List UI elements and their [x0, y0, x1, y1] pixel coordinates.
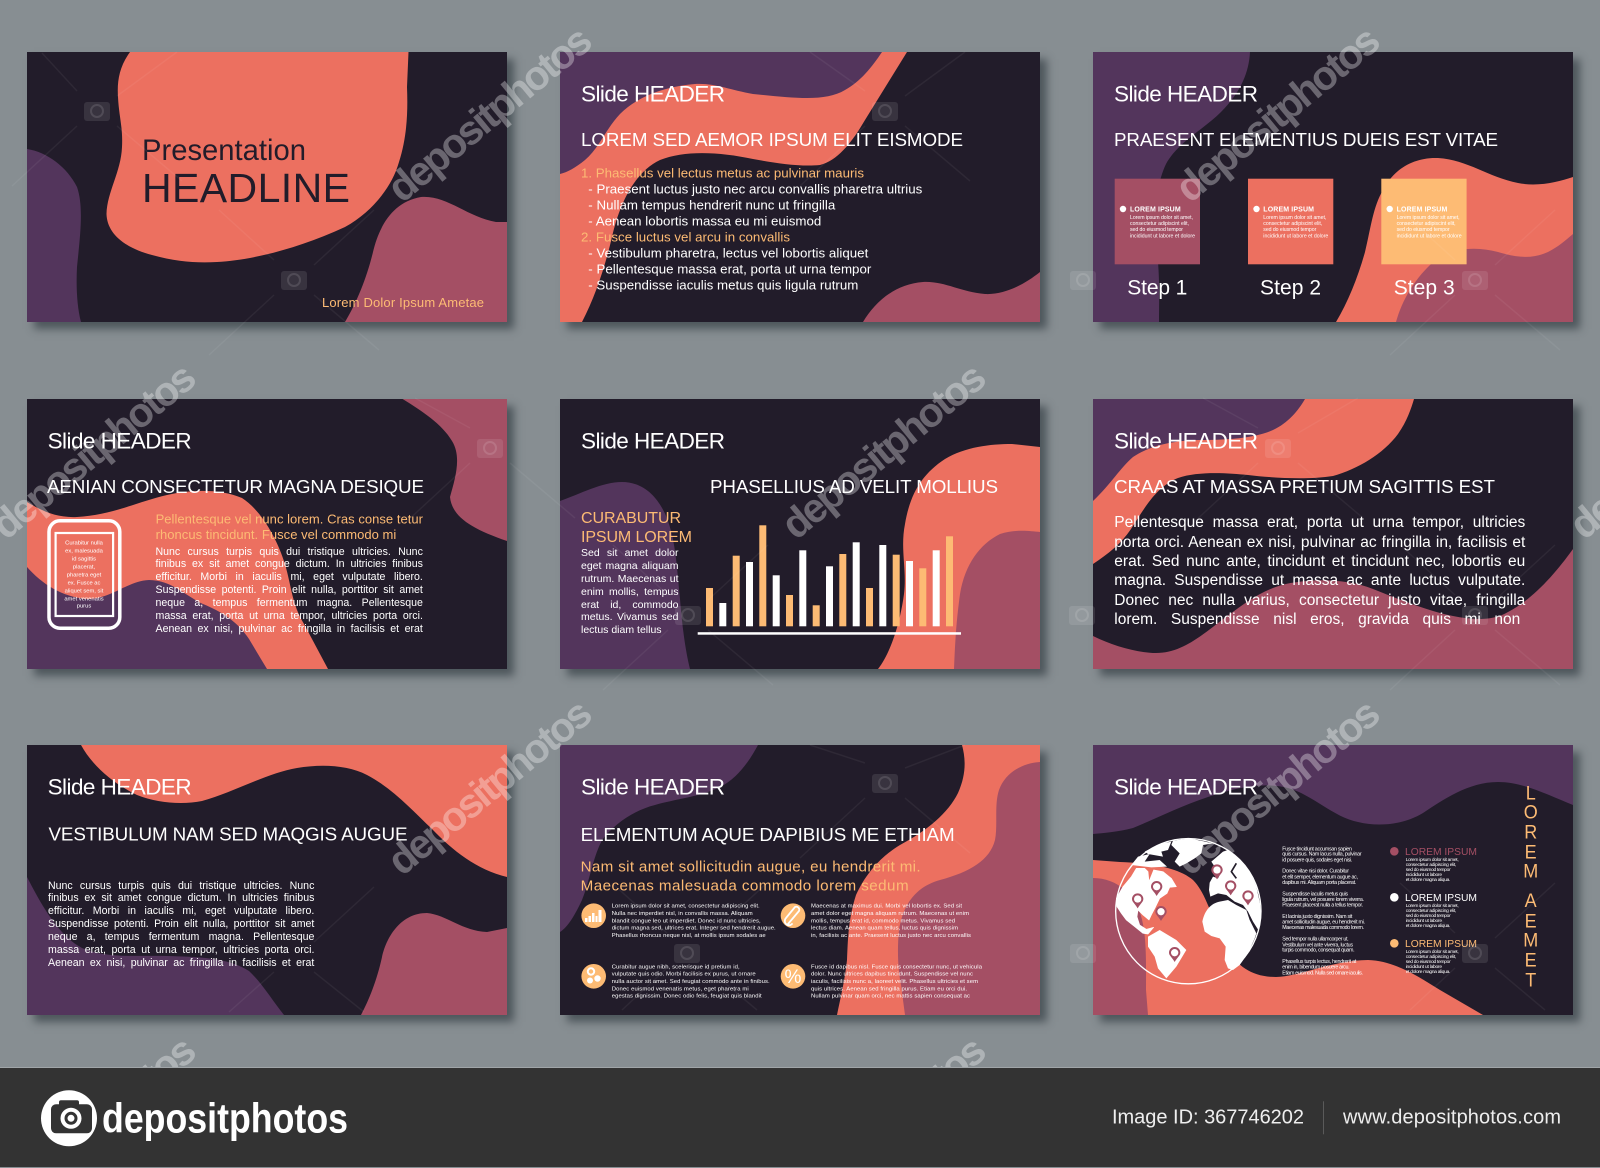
icon: phone with text: placerat,	[72, 564, 95, 570]
text block 1	[612, 904, 776, 939]
slide 2: numbered list	[560, 52, 1040, 322]
icon: paperclip	[781, 903, 805, 928]
body paragraph: finibus ex sit amet congue dictum. In ultricies finibus	[156, 558, 423, 570]
icon: phone with text: amet venenatis	[64, 596, 103, 602]
body paragraph: finibus ex sit amet congue dictum. In ultricies finibus	[48, 892, 314, 904]
text column: Praesent placerat nulla a tellus tempor.	[1283, 903, 1363, 909]
bar chart	[698, 525, 961, 634]
shape: purple bottom	[26, 877, 284, 1015]
icon: phone with text: Curabitur nulla	[65, 540, 103, 546]
vertical title: M	[1524, 930, 1538, 952]
text column: Donec vitae nisi dolor. Curabitur	[1283, 869, 1350, 875]
orange lead text: Nam sit amet sollicitudin augue, eu hendrerit mi.	[581, 858, 921, 875]
text column: Fusce tincidunt accumsan sapien	[1283, 846, 1352, 852]
slide header: Slide HEADER	[47, 774, 191, 799]
vertical title: E	[1525, 950, 1537, 972]
subtitle: Lorem Dolor Ipsum Ametae	[322, 295, 484, 310]
text column: et elit semper, elementum augue ac,	[1283, 874, 1358, 880]
numbered list: - Suspendisse iaculis metus quis ligula rutrum	[588, 277, 858, 292]
orange lead text: Pellentesque vel nunc lorem. Cras conse tetur	[155, 511, 423, 526]
slide header: Slide HEADER	[581, 774, 725, 799]
legend item 1: LOREM IPSUM	[1405, 847, 1477, 858]
shape: rose wave	[1396, 234, 1573, 322]
shape: purple top	[1093, 745, 1573, 834]
icon: phone with text: id sagittis	[71, 556, 96, 562]
orange lead text: rhoncus tincidunt. Fusce vel commodo mi	[155, 527, 396, 542]
vertical title: A	[1525, 891, 1537, 912]
body paragraph: neque a, tempus fermentum magna. Pellentesque	[156, 597, 423, 609]
shape: rose bottom	[360, 913, 506, 1015]
slide header: Slide HEADER	[47, 428, 191, 453]
icon: phone with text: ex. Fusce ac	[67, 580, 100, 586]
slide 8: four icon blocks	[560, 745, 1040, 1015]
text block 3: Donec euismod venenatis metus, eget pharetra mi	[612, 986, 749, 992]
icon: percent: %	[785, 967, 802, 988]
slide header: Slide HEADER	[1114, 81, 1258, 106]
step card 2: sed do eiusmod tempor	[1264, 227, 1317, 233]
heading: presentation: Presentation	[142, 135, 306, 167]
slide header: Slide HEADER	[1114, 774, 1258, 799]
icon: phone with text: aliquet sem, sit	[64, 588, 103, 594]
shape: purple blob	[26, 149, 80, 322]
shape: rose wave	[863, 272, 1040, 322]
step card 1: LOREM IPSUM	[1130, 206, 1181, 213]
body paragraph: Nunc cursus turpis quis dui tristique ultricies. Nunc	[156, 546, 423, 558]
step card 1: Lorem ipsum dolor sit amet,	[1130, 215, 1193, 221]
vertical title: E	[1525, 842, 1537, 864]
icon: phone with text: purus	[76, 603, 91, 609]
side paragraph: enim mollis, tempus	[581, 586, 678, 598]
step card 2: incididunt ut labore et dolore	[1264, 233, 1329, 239]
text block 1: dictum magna sed, ultrices erat. Integer sed hendrerit augue.	[612, 926, 776, 932]
text block 4: dolor. Nunc ultrices dapibus tincidunt. Suspendisse vel nunc	[811, 972, 973, 978]
text column: ligula rutrum, vel posuere lorem viverra.	[1283, 897, 1364, 903]
body paragraph: Suspendisse potenti. Proin elit nulla, porttitor sit amet	[48, 918, 314, 930]
text column: Sed tempor nulla ullamcorper ut.	[1283, 937, 1349, 943]
body paragraph: massa erat, porta ut urna tempor, ultricies porta orci.	[48, 944, 314, 956]
side paragraph	[581, 547, 678, 636]
footer logo	[41, 1090, 348, 1146]
icon: phone with text: pharetra eget	[66, 572, 101, 578]
step card 3: LOREM IPSUM	[1397, 206, 1448, 213]
body paragraph	[48, 880, 314, 969]
text block 2: in, facilisis ac ante. Praesent luctus justo nec arcu convallis	[811, 933, 971, 939]
legend item 2: et dolore magna aliqua.	[1406, 923, 1451, 929]
watermark overlay: depositphotos	[772, 353, 995, 548]
vertical title: L	[1526, 783, 1536, 805]
text block 1: Phasellus rhoncus neque nisl, at mollis ipsum sodales ae	[612, 933, 766, 939]
text block 1: blandit congue leo ut imperdiet. Donec id nunc ultricies,	[612, 918, 761, 924]
shape: purple corner	[560, 52, 890, 182]
watermark overlay: depositphotos	[1166, 689, 1389, 884]
legend item 2	[1390, 893, 1477, 929]
body paragraph: erat. Sed nunc ante, tincidunt et tincidunt nec, lobortis eu	[1114, 553, 1525, 570]
legend item 1	[1390, 847, 1477, 883]
legend item 2: Lorem ipsum dolor sit amet,	[1406, 903, 1459, 909]
image id: Image ID: 367746202	[1112, 1106, 1304, 1128]
step card 1	[1115, 178, 1200, 264]
shape: purple corner	[560, 745, 758, 932]
body paragraph	[1114, 514, 1526, 628]
text block 2: Maecenas at maximus dui. Morbi vel lobortis ex. Sed sit	[811, 904, 962, 910]
legend item 3: LOREM IPSUM	[1405, 939, 1477, 950]
vertical title: M	[1524, 861, 1538, 883]
shape: coral top	[80, 745, 506, 877]
icon: phone with text: ex, malesuada	[65, 548, 103, 554]
shape: coral wave	[1093, 398, 1414, 564]
text column: Maecenas malesuada commodo lorem.	[1283, 925, 1364, 931]
icon: chart	[581, 903, 606, 928]
text block 2: mollis, tempus erat id, commodo metus. Vivamus sed	[811, 918, 955, 924]
side heading: CURABUTUR	[581, 510, 681, 526]
legend item 3: consectetur adipiscing elit,	[1406, 954, 1457, 960]
text block 4: iaculis, facilisis nunc a, laoreet velit. Phasellus ultricies et sem	[811, 979, 978, 985]
body paragraph: efficitur. Morbi in iaculis mi, eget vulputate libero.	[156, 571, 423, 583]
body paragraph: Aenean ex nisi, pulvinar ac fringilla in facilisis et erat	[156, 623, 423, 635]
side paragraph: metus. Vivamus sed	[581, 611, 678, 623]
side heading	[581, 510, 692, 546]
watermark overlay: depositphotos	[1166, 16, 1389, 211]
legend item 3: Lorem ipsum dolor sit amet,	[1406, 949, 1459, 955]
numbered list: 2. Fusce luctus vel arcu in convallis	[581, 229, 790, 244]
text column: Et lacinia justo dignissim. Nam sit	[1283, 914, 1353, 920]
body paragraph: Nunc cursus turpis quis dui tristique ultricies. Nunc	[48, 880, 314, 892]
icon: phone with text	[48, 520, 119, 628]
shape: coral blob	[106, 52, 408, 262]
slide header: Slide HEADER	[1114, 428, 1258, 453]
legend item 1: incididunt ut labore	[1406, 872, 1443, 878]
body paragraph	[156, 546, 423, 635]
shape: coral blob	[878, 444, 1040, 668]
numbered list	[581, 165, 923, 292]
shape: purple wave	[26, 566, 266, 668]
legend item 3: et dolore magna aliqua.	[1406, 969, 1451, 975]
step labels: Step 2	[1260, 276, 1321, 299]
orange lead text: Maecenas malesuada commodo lorem sedum	[581, 878, 909, 895]
slide 5: bar chart	[560, 398, 1040, 668]
legend item 1: consectetur adipiscing elit,	[1406, 862, 1457, 868]
shape: purple blob	[560, 482, 690, 668]
numbered list: - Praesent luctus justo nec arcu convallis pharetra ultrius	[588, 181, 923, 196]
text block 3: egestas dignissim. Donec odio felis, feugiat quis blandit	[612, 994, 762, 1000]
shape: purple side	[1093, 52, 1250, 322]
step labels: Step 1	[1128, 276, 1188, 299]
text block 4: Fusce id dapibus nisl. Fusce quis consectetur nunc, ut vehicula	[811, 964, 983, 970]
slide subtitle: PHASELLIUS AD VELIT MOLLIUS	[710, 476, 998, 496]
numbered list: 1. Phasellus vel lectus metus ac pulvinar mauris	[581, 165, 864, 180]
legend item 1: et dolore magna aliqua.	[1406, 877, 1451, 883]
watermark overlay: depositphotos	[378, 16, 601, 211]
numbered list: - Vestibulum pharetra, lectus vel lobortis aliquet	[588, 245, 869, 260]
step card 3: sed do eiusmod tempor	[1397, 227, 1450, 233]
slide subtitle: PRAESENT ELEMENTIUS DUEIS EST VITAE	[1114, 129, 1498, 150]
text column: Etiam euismod. Nulla sed ornare iaculis.	[1283, 970, 1363, 976]
shape: coral wave	[1336, 158, 1573, 322]
body paragraph: Donec nec nulla varius, consectetur justo vitae, fringilla	[1114, 592, 1525, 609]
legend item 1: sed do eiusmod tempor	[1406, 867, 1451, 873]
numbered list: - Nullam tempus hendrerit nunc ut fringilla	[588, 197, 836, 212]
text column: Suspendisse iaculis metus quis	[1283, 891, 1349, 897]
text column: Vestibulum vel ante viverra, luctus	[1283, 942, 1354, 948]
step card 1: consectetur adipiscint elit,	[1130, 221, 1189, 227]
step card 3: incididunt ut labore et dolore	[1397, 233, 1462, 239]
slide 9: globe	[1093, 745, 1573, 1015]
side paragraph: Sed sit amet dolor	[581, 547, 678, 559]
vertical title: R	[1525, 822, 1537, 844]
slide subtitle: ELEMENTUM AQUE DAPIBIUS ME ETHIAM	[581, 824, 955, 845]
step card 2: Lorem ipsum dolor sit amet,	[1264, 215, 1327, 221]
shape: rose wave	[1093, 548, 1573, 668]
body paragraph: magna. Suspendisse ut massa ac ante luctus vulputate.	[1114, 572, 1525, 589]
slide 4: phone and text	[26, 398, 506, 668]
step card 3: Lorem ipsum dolor sit amet,	[1397, 215, 1460, 221]
legend item 3	[1390, 939, 1477, 975]
numbered list: - Aenean lobortis massa eu mi euismod	[588, 213, 821, 228]
step card 3: consectetur adipiscint elit,	[1397, 221, 1456, 227]
step card 1: sed do eiusmod tempor	[1130, 227, 1184, 233]
step card 1: incididunt ut labore et dolore	[1130, 233, 1195, 239]
side heading: IPSUM LOREM	[581, 528, 692, 546]
vertical title: E	[1525, 911, 1537, 933]
shape: rose blob	[954, 530, 1040, 668]
text block 4: Nullam pulvinar quam orci, nec mattis sapien consequat ac	[811, 994, 970, 1000]
shape: rose corner	[402, 398, 506, 540]
footer bar	[0, 1067, 1600, 1167]
legend item 2: sed do eiusmod tempor	[1406, 913, 1451, 919]
shape: rose blob	[344, 197, 506, 322]
step labels	[1128, 276, 1455, 299]
slide header: Slide HEADER	[581, 428, 725, 453]
watermark overlay: depositphotos	[378, 689, 601, 884]
legend item 3: sed do eiusmod tempor	[1406, 959, 1451, 965]
text block 4: quis ultrices. Aenean sed fringilla purus. Etiam eu orci dui.	[811, 986, 967, 992]
step card 2: consectetur adipiscint elit,	[1264, 221, 1323, 227]
slide 7: text left	[26, 745, 506, 1015]
text column: dapibus mi. Aliquam porta placerat.	[1283, 880, 1357, 886]
text column: amet sollicitudin augue, eu hendrerit mi.	[1283, 920, 1365, 926]
step card 2: LOREM IPSUM	[1264, 206, 1314, 213]
text block 3: Curabitur augue nibh, scelerisque id pretium id,	[612, 964, 740, 970]
heading: headline: HEADLINE	[142, 165, 350, 211]
body paragraph: Pellentesque massa erat, porta ut urna tempor, ultricies	[1114, 514, 1525, 531]
side paragraph: eget magna aliquam	[581, 560, 678, 572]
icon: gears	[581, 964, 606, 989]
step card 3	[1382, 178, 1467, 264]
slide subtitle: VESTIBULUM NAM SED MAQGIS AUGUE	[48, 823, 407, 844]
slide 6: long text	[1093, 398, 1573, 668]
text column: enim in, bibendum posuere arcu.	[1283, 965, 1350, 971]
body paragraph: porta orci. Aenean ex nisi, pulvinar ac fringilla in, facilisis et	[1114, 534, 1525, 551]
text block 3	[612, 964, 770, 1000]
side paragraph: rutrum. Maecenas ut	[581, 573, 678, 585]
body paragraph: Suspendisse potenti. Proin elit nulla, porttitor sit amet	[156, 584, 423, 596]
text block 4	[811, 964, 983, 1000]
icon: globe with map pins	[1116, 838, 1261, 984]
shape: coral wave	[560, 52, 907, 322]
text block 2: lectus diam. Aenean quam tellus, luctus quis dignissim	[811, 926, 958, 932]
text block 2	[811, 904, 971, 939]
slide 3: three steps	[1093, 52, 1573, 322]
body paragraph: massa erat, porta ut urna tempor, ultricies porta orci.	[156, 610, 423, 622]
slide 1: title slide	[26, 52, 506, 322]
website: www.depositphotos.com	[1342, 1106, 1561, 1128]
text column: turpis commodo, consequat quam.	[1283, 948, 1355, 954]
body paragraph: lorem. Suspendisse nisl eros, gravida quis mi non	[1114, 611, 1520, 628]
text column: Phasellus turpis lectus, hendrerit at	[1283, 959, 1357, 965]
legend item 1: Lorem ipsum dolor sit amet,	[1406, 857, 1459, 863]
text block 3: nulla auctor sit amet. Sed feugiat commodo ante in finibus.	[612, 979, 770, 985]
footer logo: depositphotos	[102, 1094, 348, 1141]
text block 1: Lorem ipsum dolor sit amet, consectetur adipiscing elit.	[612, 904, 760, 910]
step card 2	[1248, 178, 1334, 264]
shape: rose wave	[898, 762, 1040, 1015]
numbered list: - Pellentesque massa erat, porta ut urna tempor	[588, 261, 872, 276]
text column: quis cursus. Nam lacus nulla, pulvinar	[1283, 852, 1362, 858]
vertical title: O	[1524, 802, 1538, 824]
vertical title: T	[1525, 970, 1537, 992]
text column	[1283, 846, 1365, 976]
legend item 2: incididunt ut labore	[1406, 918, 1443, 924]
text column: id posuere quis, sodales eget nisi.	[1283, 857, 1353, 863]
slide subtitle: LOREM SED AEMOR IPSUM ELIT EISMODE	[581, 129, 963, 150]
body paragraph: Aenean ex nisi, pulvinar ac fringilla in facilisis et erat	[48, 957, 314, 969]
shape: coral wave	[837, 745, 1040, 1015]
slide subtitle: CRAAS AT MASSA PRETIUM SAGITTIS EST	[1114, 476, 1496, 496]
shape: coral wave	[26, 490, 328, 668]
shape: rose left	[1093, 878, 1148, 1015]
text block 1: Nulla nec imperdiet nisl, in convallis massa. Aliquam	[612, 911, 753, 917]
legend item 3: incididunt ut labore	[1406, 964, 1443, 970]
slide header: Slide HEADER	[581, 81, 725, 106]
shape: purple corner	[1093, 398, 1305, 508]
text block 2: amet dolor eget magna aliquam rutrum. Maecenas ut enim	[811, 911, 969, 917]
shape: coral bottom	[1093, 860, 1483, 1015]
body paragraph: efficitur. Morbi in iaculis mi, eget vulputate libero.	[48, 905, 314, 917]
body paragraph: neque a, tempus fermentum magna. Pellentesque	[48, 931, 314, 943]
slide subtitle: AENIAN CONSECTETUR MAGNA DESIQUE	[46, 476, 424, 496]
side paragraph: erat id, commodo	[581, 599, 678, 611]
icon: percent	[781, 964, 805, 989]
side paragraph: lectus diam tellus	[581, 624, 662, 636]
legend item 2: consectetur adipiscing elit,	[1406, 908, 1457, 914]
orange lead text	[155, 511, 423, 542]
orange lead text	[581, 858, 921, 895]
legend item 2: LOREM IPSUM	[1405, 893, 1477, 904]
text block 3: vulputate quis odio. Morbi facilisis ex purus, ut ornare	[612, 972, 756, 978]
step labels: Step 3	[1394, 276, 1455, 299]
